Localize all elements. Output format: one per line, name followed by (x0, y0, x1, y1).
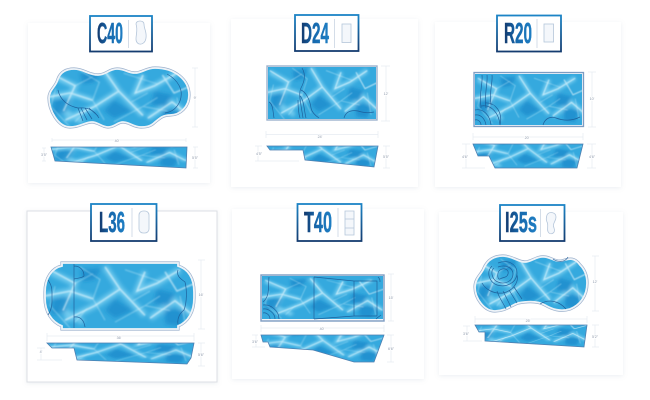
dimensions I25s: 3'6" (463, 332, 470, 336)
dimensions T40: 15' (389, 296, 394, 300)
badge L36 (91, 204, 156, 241)
dimensions T40: 3'6" (252, 340, 259, 344)
section view I25s (474, 324, 588, 348)
badge I25s: I25s (505, 207, 537, 239)
badge L36: L36 (99, 207, 125, 239)
pool plan view I25s (473, 254, 589, 313)
dimensions L36: 4' (40, 350, 43, 354)
dimensions D24: 12' (384, 92, 389, 96)
dimensions C40: 3'5" (41, 153, 48, 157)
pool plan view C40 (47, 66, 191, 129)
dimensions L36 (37, 260, 205, 366)
badge R20: R20 (504, 18, 532, 50)
section view T40 (260, 334, 384, 362)
dimensions R20: 10' (590, 97, 595, 101)
pool plan view R20 (473, 72, 584, 128)
dimensions L36: 16' (199, 293, 204, 297)
dimensions T40 (252, 274, 395, 362)
section view D24 (266, 146, 378, 168)
dimensions C40: 9' (194, 96, 197, 100)
section view C40 (50, 146, 188, 168)
badge C40: C40 (97, 18, 123, 50)
pool plan view L36 (43, 261, 196, 331)
panel: I25s pool (439, 205, 623, 375)
dimensions R20 (462, 72, 596, 168)
dimensions C40: 5'5" (192, 156, 199, 160)
section view L36 (46, 342, 194, 364)
panel: R20 pool (435, 16, 621, 187)
badge T40: T40 (304, 207, 332, 239)
dimensions D24: 5'5" (383, 155, 390, 159)
dimensions I25s: 25' (526, 319, 531, 323)
pool plan view D24 (266, 65, 378, 121)
dimensions L36: 36' (117, 336, 122, 340)
dimensions T40: 40' (320, 327, 325, 331)
dimensions D24 (255, 66, 390, 168)
dimensions R20: 20' (525, 136, 530, 140)
panel: D24 pool (231, 15, 418, 187)
panel: C40 pool (28, 16, 210, 183)
dimensions D24: 4'5" (256, 152, 263, 156)
dimensions R20: 4'6" (462, 155, 469, 159)
dimensions R20: 4'6" (589, 155, 596, 159)
dimensions T40: 6'6" (388, 347, 395, 351)
dimensions I25s: 12' (593, 280, 598, 284)
section view R20 (472, 144, 584, 168)
dimensions I25s: 5'2" (592, 335, 599, 339)
dimensions I25s (463, 256, 599, 347)
dimensions C40 (41, 68, 199, 168)
badge D24: D24 (301, 18, 329, 50)
panel: T40 pool (232, 204, 424, 379)
pool plan view T40 (260, 274, 385, 322)
dimensions C40: 40' (115, 139, 120, 143)
dimensions D24: 24' (318, 135, 323, 139)
badge T40 (298, 204, 362, 241)
dimensions L36: 5'6" (198, 353, 205, 357)
panel: L36 pool (27, 204, 217, 382)
